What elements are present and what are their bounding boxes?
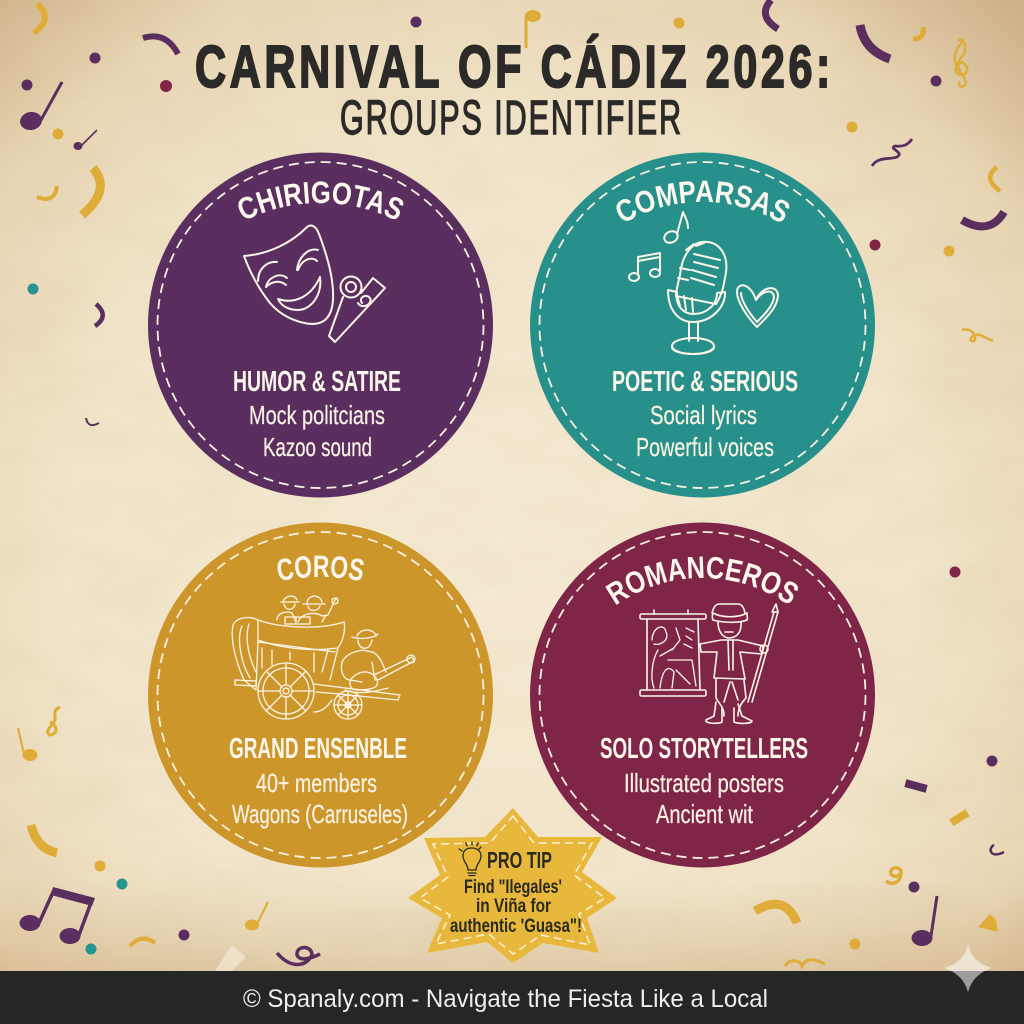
text: poetic and serious: Powerful voices (636, 432, 774, 462)
panel: chirigotas (148, 152, 493, 498)
text: pro tip: in Viña for (476, 896, 551, 917)
callout: pro tip badge (408, 808, 617, 963)
icon: light bulb (459, 842, 481, 876)
icon: microphone, notes and heart (629, 212, 778, 354)
heading: coros: COROS (278, 556, 364, 580)
heading: chirigotas: CHIRIGOTAS (238, 181, 404, 219)
text: pro tip: authentic 'Guasa"! (450, 916, 582, 937)
text: humor and satire (233, 366, 401, 462)
heading: romanceros: ROMANCEROS (605, 556, 798, 605)
panel: romanceros (530, 522, 875, 868)
text: pro tip: PRO TIP (487, 847, 552, 873)
text: grand ensemble: 40+ members (256, 768, 377, 798)
heading: comparsas: COMPARSAS (616, 180, 790, 222)
text: grand ensemble: Wagons (Carruseles) (232, 799, 408, 829)
icon: laughing mask and kazoo (244, 226, 385, 342)
text: pro tip: Find "Ilegales' (464, 877, 562, 898)
panel: coros (148, 522, 493, 868)
footer bar (0, 971, 1024, 1024)
icon: storyteller with illustrated poster (640, 604, 778, 723)
text: solo storytellers (600, 733, 808, 829)
text: humor and satire: Mock politcians (249, 400, 385, 430)
icon: carnival wagon with musicians (232, 596, 415, 719)
text: pro tip (450, 847, 582, 937)
footer bar: © Spanaly.com - Navigate the Fiesta Like a Local (243, 985, 768, 1013)
panel: comparsas (530, 152, 875, 498)
text: poetic and serious: POETIC & SERIOUS (612, 366, 798, 398)
text: poetic and serious (612, 366, 798, 462)
title (195, 34, 834, 145)
text: solo storytellers: Illustrated posters (624, 768, 784, 798)
text: humor and satire: Kazoo sound (263, 432, 372, 462)
text: grand ensemble (229, 733, 408, 829)
text: grand ensemble: GRAND ENSENBLE (229, 733, 407, 765)
text: poetic and serious: Social lyrics (650, 400, 757, 430)
sparkle mark (944, 944, 992, 992)
text: humor and satire: HUMOR & SATIRE (233, 366, 401, 398)
title: GROUPS IDENTIFIER (340, 92, 683, 145)
text: solo storytellers: SOLO STORYTELLERS (600, 733, 808, 765)
text: solo storytellers: Ancient wit (656, 799, 754, 829)
